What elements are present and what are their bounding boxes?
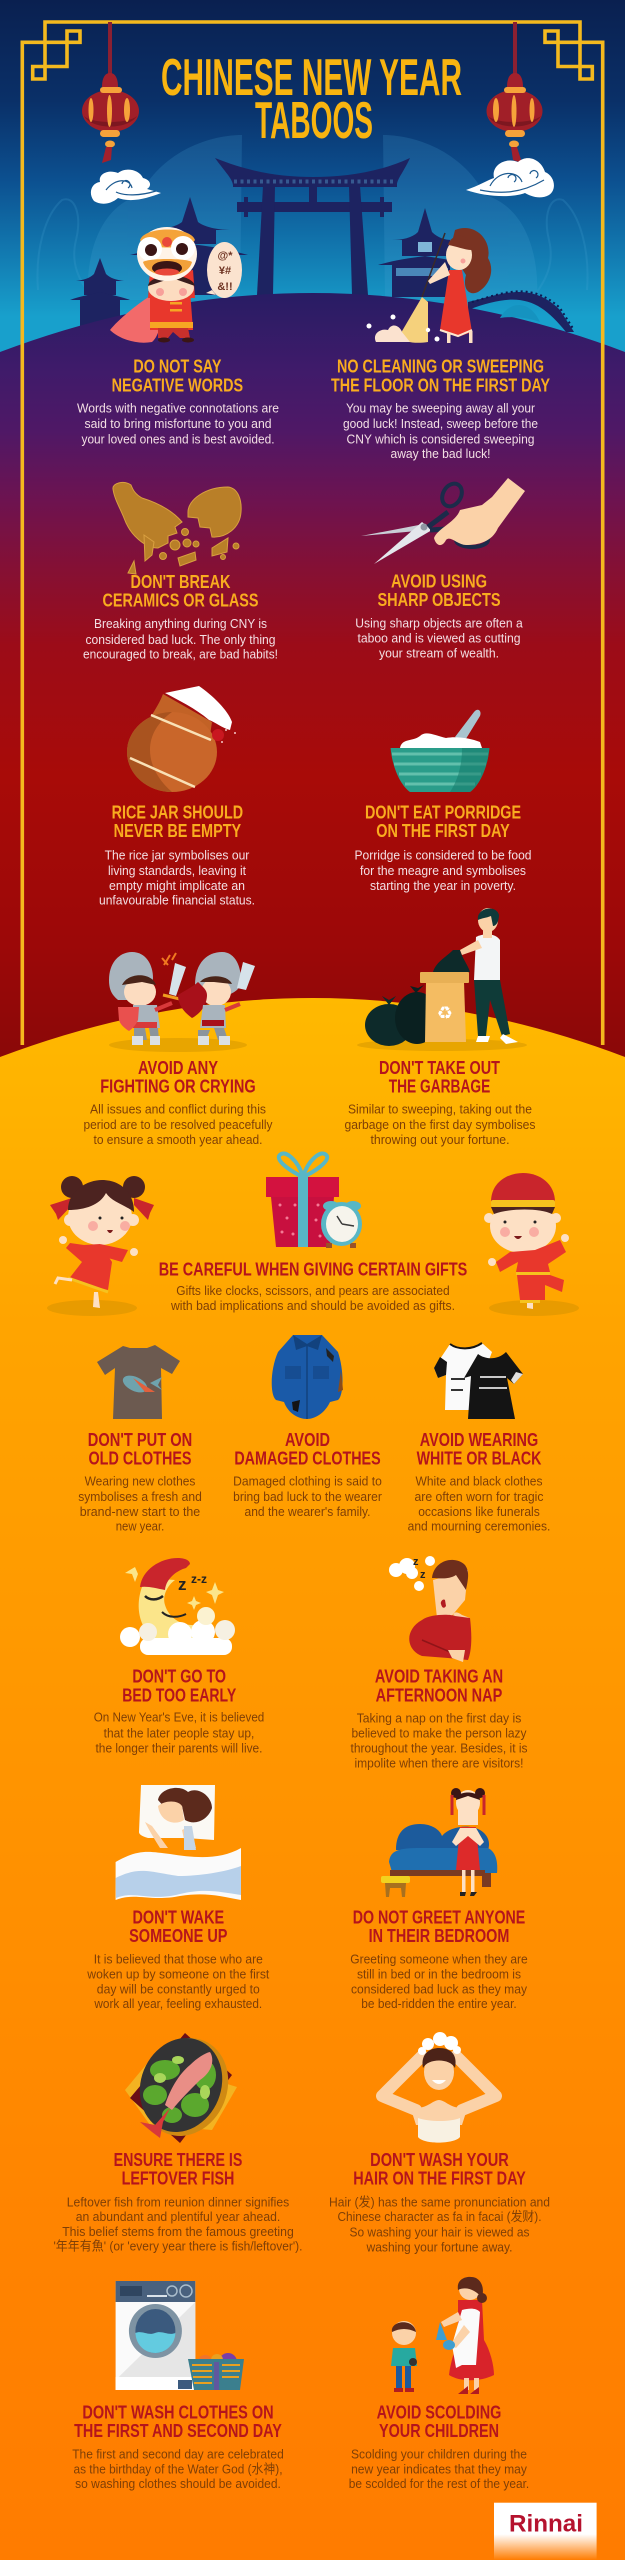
- heading: THE FLOOR ON THE FIRST DAY: [331, 375, 550, 395]
- text block: as the birthday of the Water God (水神),: [74, 2461, 282, 2476]
- heading: AVOID SCOLDING: [377, 2402, 501, 2422]
- text block: '年年有魚' (or 'every year there is fish/leftover').: [54, 2239, 302, 2254]
- text block: Wearing new clothes: [85, 1474, 196, 1489]
- heading: BE CAREFUL WHEN GIVING CERTAIN GIFTS: [159, 1260, 467, 1280]
- heading: AVOID ANY: [138, 1058, 218, 1078]
- panel: careful with gifts: [159, 1260, 467, 1313]
- icon: man taking out garbage: ♻: [437, 1003, 453, 1024]
- text block: symbolises a fresh and: [78, 1489, 202, 1504]
- panel: don't put on old clothes: [78, 1430, 202, 1534]
- heading: AVOID USING: [391, 572, 487, 592]
- heading: SOMEONE UP: [129, 1926, 228, 1946]
- panel: don't wash clothes: [72, 2402, 284, 2491]
- heading: NEVER BE EMPTY: [114, 821, 241, 841]
- panel: avoid wearing white or black: [408, 1430, 550, 1534]
- text block: taboo and is viewed as cutting: [358, 631, 520, 646]
- text block: Gifts like clocks, scissors, and pears are associated: [176, 1283, 450, 1298]
- icon: broken ceramic vase: [113, 482, 241, 574]
- heading: YOUR CHILDREN: [379, 2421, 499, 2441]
- icon: mother and child: [391, 2277, 494, 2394]
- panel: don't wake someone up: [86, 1907, 270, 2011]
- text block: to ensure a smooth year ahead.: [94, 1132, 262, 1147]
- heading: ON THE FIRST DAY: [376, 821, 510, 841]
- heading: DON'T WAKE: [132, 1907, 224, 1927]
- icon: girl in red dress: [47, 1176, 154, 1316]
- icon: speech bubble with symbols: ¥#: [219, 265, 231, 277]
- heading: [331, 357, 550, 395]
- text block: considered bad luck. The only thing: [86, 632, 276, 647]
- torii band dots: [234, 180, 396, 184]
- text block: White and black clothes: [416, 1474, 543, 1489]
- heading: AVOID WEARING: [420, 1430, 538, 1450]
- heading: DO NOT SAY: [133, 357, 221, 377]
- icon: lion dance child: [110, 227, 197, 343]
- panel: avoid afternoon nap: [350, 1667, 528, 1770]
- golden lower hill: [0, 998, 625, 2560]
- text block: [233, 1474, 382, 1519]
- text block: throwing out your fortune.: [370, 1132, 510, 1147]
- panel: do not greet in bedroom: [350, 1907, 528, 2011]
- text block: that the later people stay up,: [104, 1725, 254, 1740]
- text block: away the bad luck!: [390, 446, 490, 461]
- text block: your stream of wealth.: [379, 646, 499, 661]
- text block: Breaking anything during CNY is: [94, 616, 267, 631]
- heading: DO NOT GREET ANYONE: [353, 1907, 525, 1927]
- text block: are often worn for tragic: [414, 1489, 544, 1504]
- icon: sleeping moon on cloud: z: [178, 1575, 186, 1594]
- heading: HAIR ON THE FIRST DAY: [353, 2169, 526, 2189]
- text block: This belief stems from the famous greeting: [62, 2224, 294, 2239]
- panel: don't break ceramics: [83, 572, 278, 662]
- text block: and mourning ceremonies.: [408, 1519, 550, 1534]
- heading: DON'T WASH YOUR: [370, 2150, 509, 2170]
- text block: Scolding your children during the: [351, 2446, 527, 2461]
- text block: CNY which is considered sweeping: [346, 431, 534, 446]
- heading: FIGHTING OR CRYING: [100, 1077, 256, 1097]
- text block: Words with negative connotations are: [77, 401, 279, 416]
- text block: impolite when there are visitors!: [354, 1755, 524, 1770]
- panel: no cleaning or sweeping: [331, 357, 550, 461]
- panel: don't wash your hair: [329, 2150, 550, 2255]
- pagoda: far left: [70, 258, 130, 340]
- text block: with bad implications and should be avoided as gifts.: [170, 1298, 455, 1313]
- text block: garbage on the first day symbolises: [344, 1117, 536, 1132]
- icon: fighting knights: [109, 952, 255, 1052]
- icon: girl greeting by bed: [381, 1788, 497, 1897]
- text block: good luck! Instead, sweep before the: [343, 416, 538, 431]
- purple to red hill: [0, 293, 625, 1100]
- panel: avoid using sharp objects: [355, 572, 523, 661]
- heading: [100, 1058, 256, 1097]
- panel: ensure there is leftover fish: [54, 2150, 302, 2254]
- text block: believed to make the person lazy: [352, 1725, 527, 1740]
- title: TABOOS: [255, 92, 373, 150]
- text block: [99, 847, 255, 907]
- heading: AVOID TAKING AN: [375, 1667, 503, 1687]
- heading: [102, 572, 258, 611]
- text block: so washing clothes should be avoided.: [75, 2476, 281, 2491]
- text block: starting the year in poverty.: [370, 878, 516, 893]
- heading: THE FIRST AND SECOND DAY: [74, 2421, 282, 2441]
- panel: avoid fighting or crying: [84, 1058, 273, 1147]
- text block: The first and second day are celebrated: [72, 2446, 284, 2461]
- heading: [129, 1907, 228, 1946]
- pagoda: right: [378, 208, 452, 297]
- bridge: [468, 291, 574, 332]
- panel: do not say negative words: [77, 357, 279, 446]
- text block: On New Year's Eve, it is believed: [94, 1710, 264, 1725]
- heading: [74, 2402, 282, 2441]
- text block: So washing your hair is viewed as: [350, 2225, 530, 2240]
- text block: an abundant and plentiful year ahead.: [76, 2209, 280, 2224]
- icon: left cloud: [91, 170, 161, 204]
- icon: man napping: z: [420, 1569, 426, 1581]
- icon: man napping: [389, 1556, 471, 1662]
- text block: [355, 615, 523, 661]
- icon: old brown t-shirt: [97, 1345, 180, 1419]
- icon: hand with scissors: [361, 478, 525, 564]
- heading: THE GARBAGE: [389, 1077, 490, 1097]
- decorative gold frame: [22, 22, 603, 1045]
- text block: still in bed or in the bedroom is: [357, 1966, 521, 1981]
- icon: gift with clock: [266, 1153, 362, 1248]
- icon: washing machine: [116, 2281, 195, 2390]
- heading: [353, 1907, 525, 1946]
- torii gate: [215, 158, 410, 295]
- icon: man napping: z: [413, 1556, 419, 1568]
- text block: woken up by someone on the first: [86, 1966, 270, 1981]
- logo: Rinnai: [494, 2503, 597, 2560]
- text block: [94, 1710, 264, 1755]
- background elephant silhouettes: [37, 135, 588, 300]
- panel: rice jar should never be empty: [99, 802, 255, 907]
- heading: NO CLEANING OR SWEEPING: [337, 357, 544, 377]
- text block: Leftover fish from reunion dinner signifies: [67, 2195, 290, 2210]
- text block: [77, 401, 279, 446]
- heading: [112, 357, 243, 395]
- text block: [349, 2446, 529, 2491]
- text block: Damaged clothing is said to: [233, 1474, 382, 1489]
- text block: [329, 2195, 550, 2255]
- heading: IN THEIR BEDROOM: [369, 1926, 509, 1946]
- heading: [378, 572, 500, 610]
- heading: [112, 802, 243, 841]
- text block: the longer their parents will live.: [96, 1740, 262, 1755]
- heading: ENSURE THERE IS: [114, 2150, 242, 2170]
- text block: [83, 616, 278, 662]
- heading: DON'T TAKE OUT: [379, 1058, 500, 1078]
- heading: CERAMICS OR GLASS: [102, 591, 258, 611]
- icon: girl sweeping: [366, 228, 491, 343]
- panel: don't take out the garbage: [344, 1058, 536, 1147]
- text block: unfavourable financial status.: [99, 892, 255, 907]
- text block: for the meagre and symbolises: [360, 863, 526, 878]
- heading: NEGATIVE WORDS: [112, 375, 243, 395]
- text block: [350, 1710, 528, 1770]
- text block: your loved ones and is best avoided.: [82, 431, 274, 446]
- text block: bring bad luck to the wearer: [233, 1489, 382, 1504]
- text block: All issues and conflict during this: [90, 1101, 266, 1116]
- icon: right cloud: [466, 158, 554, 197]
- heading: [377, 2402, 501, 2441]
- title: [161, 49, 462, 150]
- night sky background: [0, 0, 625, 370]
- icon: person sleeping in bed: [116, 1785, 241, 1900]
- icon: boy in red outfit: [484, 1173, 579, 1316]
- text block: be scolded for the rest of the year.: [349, 2476, 529, 2491]
- heading: [122, 1667, 236, 1705]
- text block: living standards, leaving it: [108, 863, 246, 878]
- heading: [114, 2150, 242, 2189]
- text block: It is believed that those who are: [94, 1951, 263, 1966]
- text block: The rice jar symbolises our: [105, 847, 250, 862]
- heading: [234, 1430, 381, 1469]
- heading: RICE JAR SHOULD: [112, 802, 243, 822]
- text block: [78, 1474, 202, 1534]
- icon: speech bubble with symbols: [206, 242, 242, 298]
- heading: DON'T WASH CLOTHES ON: [82, 2402, 274, 2422]
- text block: [344, 1101, 536, 1147]
- text block: Chinese character as fa in facai (发财).: [338, 2209, 542, 2224]
- heading: DON'T GO TO: [132, 1667, 226, 1687]
- heading: DAMAGED CLOTHES: [234, 1449, 381, 1469]
- icon: sleeping moon on cloud: [120, 1558, 235, 1655]
- text block: said to bring misfortune to you and: [84, 416, 272, 431]
- text block: Porridge is considered to be food: [354, 847, 532, 862]
- icon: porridge bowl: [391, 710, 489, 792]
- heading: OLD CLOTHES: [88, 1449, 192, 1469]
- text block: throughout the year. Besides, it is: [350, 1740, 528, 1755]
- text block: considered bad luck as they may: [351, 1981, 527, 1996]
- text block: You may be sweeping away all your: [346, 401, 536, 416]
- text block: period are to be resolved peacefully: [84, 1117, 273, 1132]
- text block: Taking a nap on the first day is: [357, 1710, 522, 1725]
- text block: and the wearer's family.: [244, 1504, 370, 1519]
- icon: speech bubble with symbols: @*: [217, 250, 233, 262]
- panel: don't eat porridge: [354, 802, 532, 893]
- icon: woman washing hair: [382, 2032, 496, 2143]
- logo: Rinnai: Rinnai: [509, 2511, 583, 2538]
- text block: work all year, feeling exhausted.: [93, 1996, 262, 2011]
- text block: [72, 2446, 284, 2491]
- panel: avoid damaged clothes: [233, 1430, 382, 1519]
- text block: [170, 1283, 455, 1313]
- heading: DON'T BREAK: [130, 572, 230, 592]
- heading: [417, 1430, 541, 1469]
- text block: [354, 847, 532, 893]
- text block: Hair (发) has the same pronunciation and: [329, 2195, 550, 2210]
- icon: sleeping moon on cloud: z-z: [191, 1572, 207, 1586]
- heading: [365, 802, 521, 841]
- icon: right lantern: [486, 22, 542, 163]
- text block: Similar to sweeping, taking out the: [348, 1101, 532, 1116]
- text block: encouraged to break, are bad habits!: [83, 647, 278, 662]
- text block: [84, 1101, 273, 1147]
- text block: [350, 1951, 528, 2011]
- text block: new year indicates that they may: [351, 2461, 527, 2476]
- panel: avoid scolding children: [349, 2402, 529, 2491]
- heading: BED TOO EARLY: [122, 1685, 236, 1705]
- icon: speech bubble with symbols: &!!: [217, 281, 233, 293]
- heading: [375, 1667, 503, 1705]
- heading: DON'T PUT ON: [88, 1430, 192, 1450]
- text block: [343, 401, 538, 461]
- text block: occasions like funerals: [418, 1504, 540, 1519]
- text block: [86, 1951, 270, 2011]
- icon: white and black shirts: [434, 1343, 523, 1419]
- text block: [408, 1474, 550, 1534]
- heading: [353, 2150, 526, 2189]
- heading: AFTERNOON NAP: [376, 1685, 502, 1705]
- text block: [54, 2195, 302, 2254]
- heading: [379, 1058, 500, 1097]
- icon: laundry basket: [188, 2353, 244, 2390]
- heading: WHITE OR BLACK: [417, 1449, 541, 1469]
- pagoda: behind lion: [130, 197, 248, 295]
- icon: steamed fish on plate: [125, 2025, 243, 2149]
- heading: SHARP OBJECTS: [378, 590, 500, 610]
- text block: be bed-ridden the entire year.: [361, 1996, 517, 2011]
- text block: brand-new start to the: [80, 1504, 200, 1519]
- text block: day will be constantly urged to: [97, 1981, 260, 1996]
- heading: DON'T EAT PORRIDGE: [365, 802, 521, 822]
- text block: Using sharp objects are often a: [355, 615, 523, 630]
- heading: LEFTOVER FISH: [122, 2169, 234, 2189]
- heading: [88, 1430, 192, 1469]
- text block: new year.: [116, 1519, 164, 1534]
- icon: man taking out garbage: [357, 908, 527, 1051]
- icon: damaged blue shirt: [272, 1335, 343, 1419]
- icon: rice jar: [127, 686, 236, 792]
- panel: don't go to bed too early: [94, 1667, 264, 1755]
- heading: AVOID: [285, 1430, 330, 1450]
- text block: Greeting someone when they are: [350, 1951, 528, 1966]
- text block: washing your fortune away.: [366, 2240, 512, 2255]
- icon: left lantern: [82, 22, 139, 163]
- text block: empty might implicate an: [109, 878, 245, 893]
